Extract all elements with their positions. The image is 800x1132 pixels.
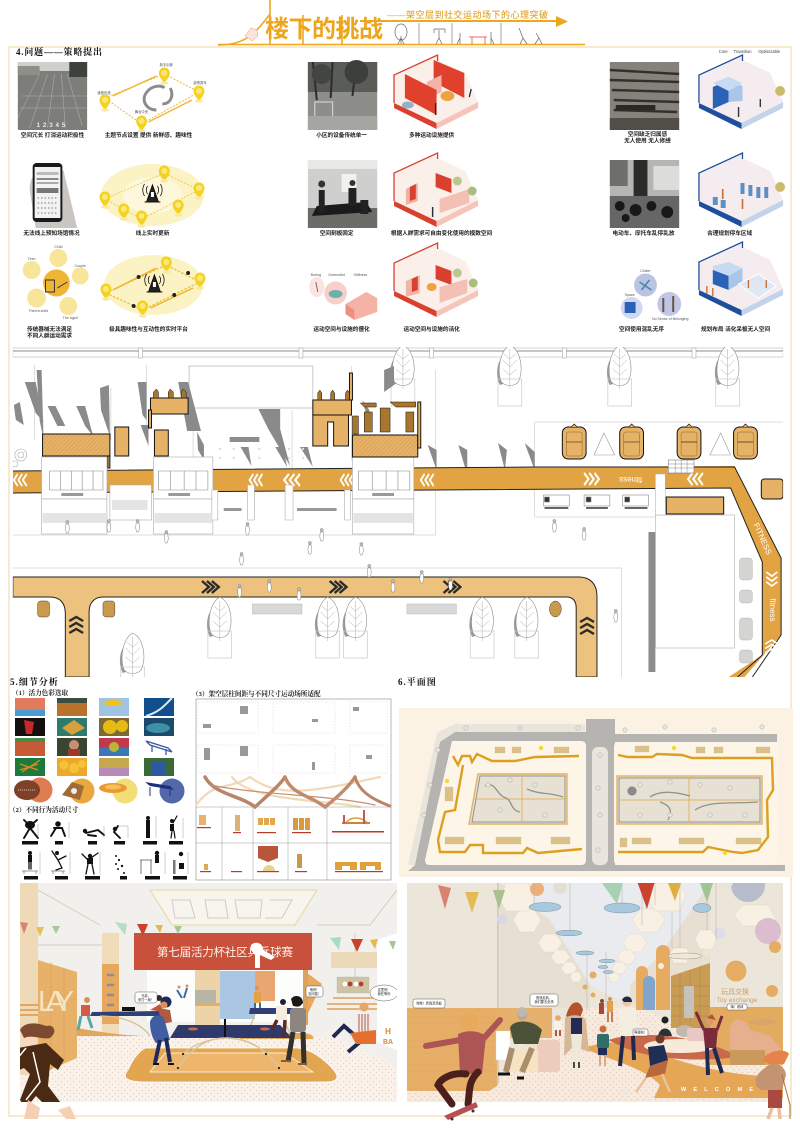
diagram: interactive platform	[100, 255, 205, 318]
photo: parked bikes	[610, 160, 679, 228]
back opening	[147, 970, 303, 1025]
bunting flags	[20, 922, 396, 952]
photo grid: vibrant colors	[14, 698, 184, 804]
speech bubbles: 嘿呀！	[310, 988, 319, 992]
plan background	[399, 708, 793, 877]
diagram: user groups	[23, 245, 89, 320]
street speech bubbles: 悠悠走着，	[536, 995, 552, 1000]
orange panel with PLAY text	[38, 960, 77, 1075]
pale sidewalks	[408, 724, 608, 865]
labels: core transition optimizable: Core	[719, 49, 728, 54]
street speech bubbles: 哇哦！看我滑滑板	[416, 1000, 443, 1006]
diagram: clutter space belonging	[621, 269, 688, 321]
isometric room: modular walls	[394, 153, 478, 227]
skater legs and board	[438, 1072, 478, 1120]
middle strip	[592, 747, 608, 865]
diagram: clutter space belonging: Space	[625, 293, 635, 297]
red ring track	[608, 1035, 730, 1060]
caption: 空间冗长 打消运动积极性	[21, 131, 85, 139]
labels: core transition optimizable: Optimizable	[758, 49, 781, 54]
speech bubbles: 我在等你	[378, 991, 391, 996]
foreground runner	[20, 1023, 64, 1102]
subheading: activity dimensions: （2）不同行为活动尺寸	[9, 805, 79, 814]
right wall elements	[303, 933, 397, 1050]
background people	[554, 997, 672, 1036]
band markings: fitness	[768, 598, 777, 622]
caption: 空间缺乏归属感	[628, 130, 667, 138]
ceiling structure	[38, 889, 397, 977]
diagram: clutter space belonging: No Sense of Belonging	[652, 317, 688, 321]
band markings	[14, 473, 778, 653]
walls	[407, 883, 783, 1102]
subheading: color selection: （1）活力色彩选取	[12, 688, 68, 697]
player in grey sweater	[281, 996, 307, 1064]
sport objects over circles	[14, 778, 184, 804]
woman in long coat	[564, 1002, 589, 1068]
caption: 无人使用 无人修缮	[624, 136, 671, 145]
icon: bird	[245, 28, 258, 41]
courtyard cross paths	[472, 776, 760, 822]
lower site outline	[13, 568, 622, 677]
building outline and column shadows	[13, 365, 783, 535]
orange route left loop	[438, 754, 582, 853]
plan accents	[203, 706, 372, 770]
trees: lower row	[120, 596, 539, 677]
isometric room: revitalized plan	[699, 242, 783, 316]
venue red bases	[197, 827, 384, 872]
sitting man with striped shirt	[333, 1002, 376, 1052]
plan trees	[422, 725, 764, 852]
venue figures	[199, 810, 381, 871]
left wooden wall	[407, 1008, 497, 1091]
right wall elements: BA	[383, 1039, 393, 1046]
speech bubbles: 兄弟，	[141, 993, 151, 998]
arrow head	[556, 16, 568, 27]
title road lines	[218, 0, 585, 45]
photo: residential equipment	[308, 60, 377, 130]
column dividers	[419, 23, 501, 44]
diagram: theme nodes loop: 激情赛车	[193, 80, 207, 85]
section heading: detail analysis: 5.细节分析	[10, 676, 59, 687]
orange arches	[636, 945, 670, 1010]
track lettering: WELCOME	[681, 1087, 753, 1093]
section heading: plan: 6.平面图	[398, 676, 437, 687]
band markings: FITNESS	[752, 522, 773, 556]
caption: 根据人群需求可自由变化使用的模数空间	[391, 229, 493, 237]
panel: column grid plans and venue sizes	[196, 699, 391, 880]
orange sport blocks	[43, 373, 421, 468]
fitness pods	[562, 424, 783, 499]
toy exchange sign: Toy exchange	[717, 997, 758, 1004]
photo: stacked worn boards	[610, 62, 679, 130]
toy exchange sign: 玩具交换	[721, 987, 749, 996]
speech bubbles: 来打一局！	[138, 997, 154, 1002]
row 4 photos	[15, 758, 174, 776]
trees: upper row	[390, 345, 740, 406]
pavilions over band	[42, 457, 414, 534]
subtitle: ——架空层到社交运动场下的心理突破	[387, 9, 548, 20]
hall wall and ceiling	[38, 883, 397, 1067]
panel: problem and strategy grid	[18, 49, 785, 340]
hanging hexagons	[500, 883, 776, 982]
old man sitting	[496, 1007, 542, 1078]
courtyards	[469, 774, 762, 824]
caption: 电动车、摩托车乱停乱放	[613, 229, 675, 237]
row 2 label chips	[24, 876, 187, 880]
competition banner	[134, 933, 312, 970]
left pillar	[20, 883, 38, 1075]
diagram: online real-time update	[99, 164, 204, 228]
street speech bubbles: 嗨！看球	[731, 1004, 744, 1009]
caption: 传统器械无法满足	[27, 325, 72, 333]
plan building markers	[445, 746, 770, 847]
icons: sport figures	[395, 24, 542, 44]
hanging rods	[534, 883, 716, 1010]
diagram: user groups: The Aged	[63, 316, 78, 320]
caption: 运动空间与设施的僵化	[313, 325, 370, 333]
lattice floor and target rings	[12, 437, 304, 467]
background players	[78, 984, 287, 1038]
runner legs past the image	[24, 1100, 76, 1119]
pins in plan	[445, 746, 727, 855]
isometric room: red walls	[394, 55, 478, 129]
caption: 线上实时更新	[136, 229, 170, 237]
diagram: boring outmoded stiffness: Boring	[311, 273, 321, 277]
court inner	[150, 1053, 313, 1072]
side table right	[237, 1008, 313, 1039]
caption: 无法线上预知场馆情况	[23, 229, 80, 237]
row 2 photos	[15, 718, 174, 736]
main table tennis table	[170, 1019, 292, 1069]
caption: 不同人群运动需求	[27, 331, 72, 340]
orange route right loop	[618, 754, 773, 853]
roads	[408, 719, 785, 871]
caption: 空间使用混乱无序	[619, 325, 664, 333]
photo: running track	[18, 62, 87, 130]
illustration: table tennis hall	[20, 883, 397, 1102]
hanging circles	[497, 868, 781, 998]
caption: 空间刻板固定	[320, 229, 354, 237]
orange court mat	[125, 1048, 337, 1082]
diagram: user groups: Couple	[75, 264, 86, 268]
row 2 silhouettes	[22, 851, 188, 874]
caption: 主题节点设置 提供 新鲜感、趣味性	[105, 131, 193, 139]
title banner	[218, 0, 585, 45]
subheading: column spacing adaptation: （3）架空层柱间距与不同尺寸运动场所适配	[192, 689, 321, 698]
isometric room: parking	[699, 153, 785, 227]
center-left column	[102, 933, 119, 1035]
diagram: theme nodes loop: 新手训练	[160, 62, 174, 67]
mid wall orange	[497, 1008, 552, 1038]
desks	[544, 495, 648, 508]
speech bubbles	[135, 985, 398, 1003]
flow curves	[196, 777, 390, 807]
street speech bubbles	[413, 994, 747, 1036]
man in white shirt	[618, 996, 638, 1066]
dotted floor	[407, 1008, 783, 1102]
caption: 多种运动设施提供	[409, 131, 454, 139]
row 1 label chips	[22, 841, 183, 844]
street speech bubbles: 等我啦！	[634, 1030, 647, 1034]
right wooden wall	[710, 1007, 783, 1065]
competition banner: 第七届活力杯社区乒乓球赛	[157, 945, 294, 959]
orange running track on floor	[583, 1042, 783, 1098]
venue cells	[196, 807, 391, 880]
row 3 photos	[15, 738, 174, 756]
caption: 规划布局 活化呆板无人空间	[701, 325, 770, 333]
section heading: problem to strategy: 4.问题——策略提出	[16, 46, 102, 57]
street speech bubbles: 我们要去全场	[534, 999, 554, 1004]
panel: site plan	[399, 708, 793, 877]
isometric room: activated	[394, 243, 478, 317]
cloud lamps	[529, 902, 711, 974]
speech bubbles: 没问题！	[308, 991, 321, 996]
benches and planters	[38, 601, 561, 617]
diagram: boring outmoded stiffness: Outmoded	[328, 273, 345, 277]
diagram: user groups: Child	[54, 245, 62, 249]
diagram: user groups: Parent-child	[29, 309, 48, 313]
old woman with cane	[756, 1051, 790, 1119]
pedestrians	[65, 519, 618, 622]
man with raised arms	[696, 1012, 722, 1075]
child in teal	[597, 1026, 609, 1066]
diagram: user groups: Teen	[28, 257, 36, 261]
main title: 楼下的挑战	[265, 16, 383, 43]
floor plans	[198, 702, 387, 773]
diagram: boring outmoded stiffness	[309, 273, 377, 320]
child in navy	[636, 1034, 670, 1092]
top rail	[13, 348, 783, 358]
bunting	[438, 879, 713, 913]
running track: lower band	[13, 577, 597, 677]
speech bubbles: 这里有！	[378, 987, 390, 992]
caption: 合理规划停车区域	[707, 229, 752, 237]
panel border	[196, 699, 391, 880]
row 1 silhouettes	[24, 816, 183, 838]
band markings: fitness	[619, 475, 642, 484]
labels: core transition optimizable: Transition	[734, 49, 752, 54]
side table left	[77, 1007, 162, 1036]
illustration: community street	[407, 868, 783, 1102]
diagram: theme nodes loop: 舞台中央	[135, 109, 149, 114]
caption: 运动空间与设施的活化	[404, 325, 460, 333]
toy exchange sign	[717, 987, 758, 1004]
caption: 极具趣味性与互动性的实时平台	[109, 325, 188, 333]
furniture	[525, 1019, 780, 1072]
caption: 小区的设备传统单一	[316, 131, 367, 139]
panel: axonometric site drawing	[12, 345, 783, 694]
ring inner	[644, 1039, 716, 1053]
running track: upper band	[13, 466, 781, 677]
grid and right building	[648, 460, 752, 672]
orange panel with PLAY text: LAY	[38, 986, 74, 1018]
panel: activity silhouettes	[22, 816, 188, 880]
sky opening	[500, 883, 710, 1000]
hall floor	[20, 1035, 397, 1102]
orange rectangle block	[666, 497, 724, 514]
diagram: theme nodes loop: 速度传递	[97, 90, 111, 95]
locker wall	[671, 963, 710, 1028]
right wall elements: H	[385, 1027, 391, 1036]
diagram: clutter space belonging: Clutter	[640, 269, 652, 273]
photo: running track: 12345	[37, 123, 68, 129]
cream building zones	[425, 741, 777, 865]
labels: core transition optimizable	[719, 49, 781, 54]
diagram: theme nodes loop	[97, 62, 207, 133]
skater kid	[426, 1013, 500, 1074]
isometric room: blue core	[699, 55, 785, 129]
photo: smartphone in hand	[30, 163, 77, 228]
diagram: boring outmoded stiffness: Stiffness	[354, 273, 367, 277]
receding wall planes	[497, 883, 710, 1088]
row 1 photos	[15, 698, 174, 716]
player in blue jacket	[150, 996, 174, 1064]
photo: table tennis room	[308, 160, 377, 228]
